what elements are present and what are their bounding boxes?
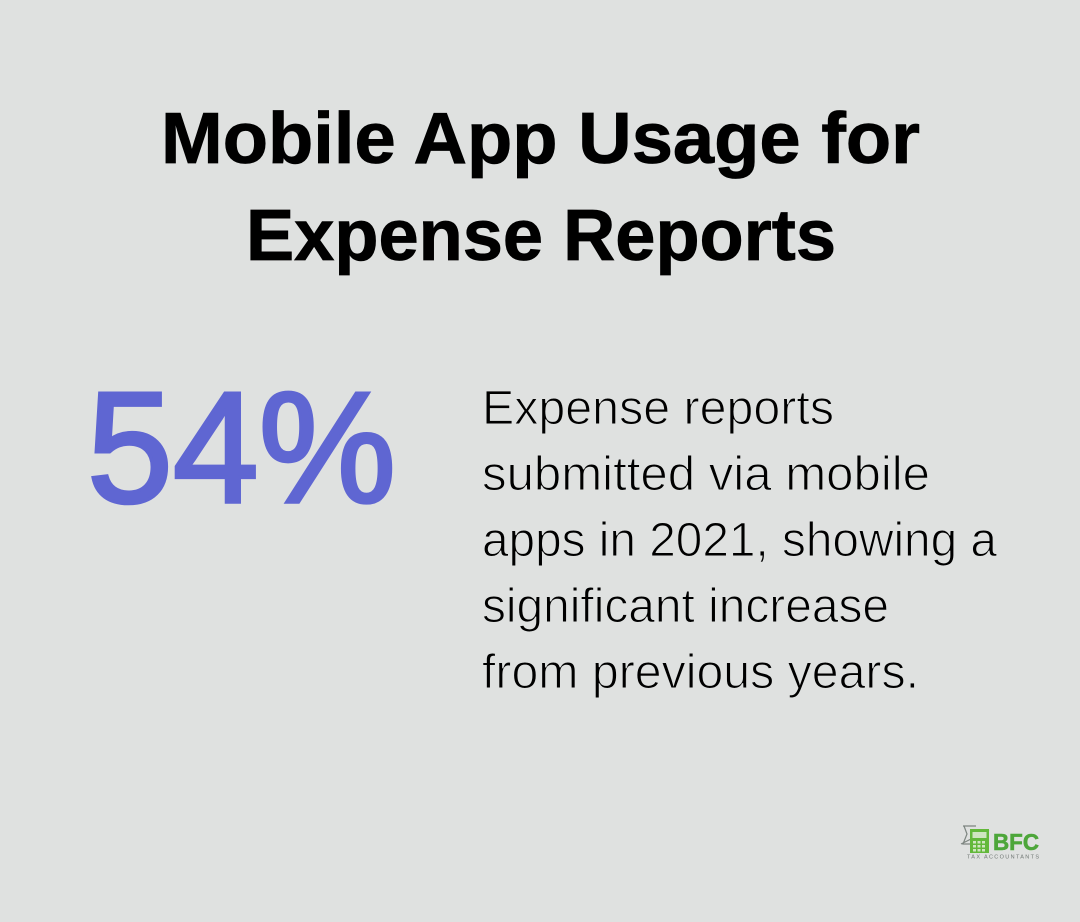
title: Mobile App Usage for <box>161 99 920 179</box>
title: Expense Reports <box>246 196 836 276</box>
logo wordmark: BFC <box>993 829 1039 855</box>
logo tagline: TAX ACCOUNTANTS <box>967 854 1039 860</box>
description text: submitted via mobile <box>482 448 930 501</box>
title <box>161 99 920 276</box>
big statistic: 54%: 54% <box>87 360 396 536</box>
logo: BFC Tax Accountants <box>961 826 1039 860</box>
description text: significant increase <box>482 580 889 633</box>
icon: calculator with papers <box>961 826 989 853</box>
description text: from previous years. <box>482 646 919 699</box>
description text: Expense reports <box>482 382 834 435</box>
description text: apps in 2021, showing a <box>482 514 997 567</box>
description text <box>482 382 997 699</box>
